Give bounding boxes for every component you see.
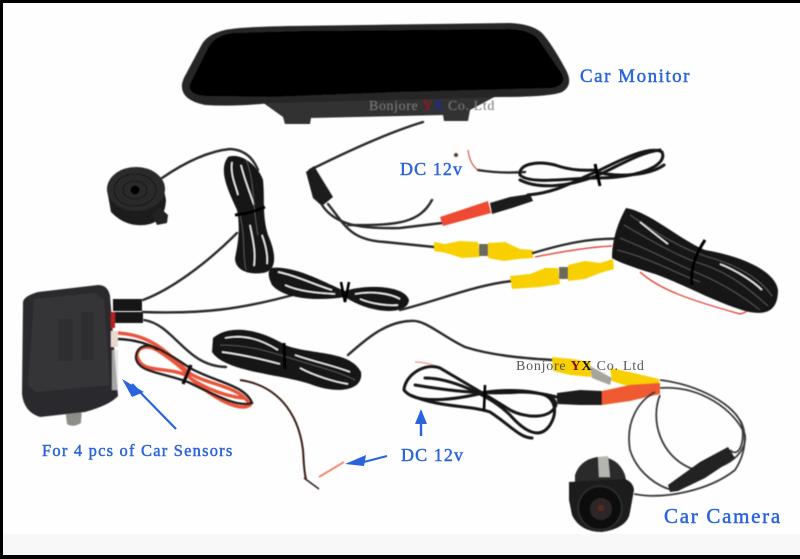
yellow RCA connector upper	[434, 241, 533, 261]
coil of black cable	[212, 321, 552, 390]
parking buzzer speaker	[107, 149, 258, 225]
red RCA plug upper	[440, 194, 533, 226]
lower cable coil	[404, 362, 557, 438]
yellow RCA connector lower	[510, 259, 614, 289]
camera red plug	[557, 383, 660, 405]
box output cable	[144, 320, 226, 367]
label: upper DC 12v: DC 12v	[400, 159, 463, 179]
large cable coil	[533, 208, 778, 314]
control box	[22, 285, 143, 426]
label: lower DC 12v: DC 12v	[401, 445, 464, 465]
label: car sensors: For 4 pcs of Car Sensors	[42, 441, 234, 460]
vertical cable coil	[143, 156, 274, 300]
upper small cable coil	[454, 150, 664, 195]
flat cable coil	[143, 268, 512, 312]
blue arrow to sensor ports	[122, 379, 176, 429]
monitor connector and cables	[306, 122, 442, 247]
car monitor mirror: Bonjore YX Co. Ltd	[369, 99, 495, 114]
label: car camera: Car Camera	[664, 504, 782, 528]
power cable coil red and black	[118, 333, 344, 489]
car monitor mirror	[182, 23, 569, 124]
camera cables and inline connector	[629, 380, 745, 496]
watermark: Bonjore YX Co. Ltd	[516, 359, 645, 374]
blue arrow to lower power lead	[415, 409, 427, 436]
camera yellow RCA plug	[552, 357, 659, 388]
label: car monitor: Car Monitor	[580, 66, 691, 87]
blue arrow to power wire	[345, 455, 387, 466]
car camera	[569, 456, 634, 532]
